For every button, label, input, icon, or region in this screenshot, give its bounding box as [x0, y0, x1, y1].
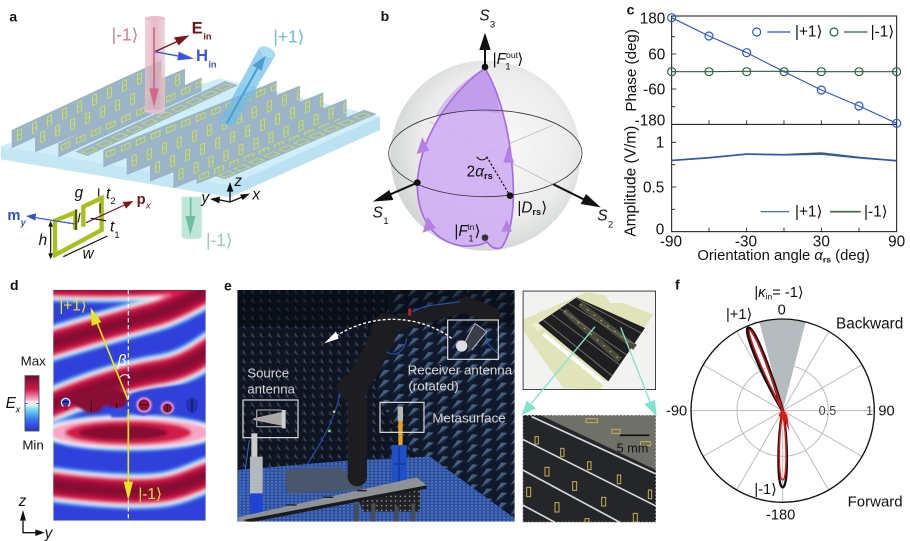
E field arrow: in: [203, 31, 212, 41]
axes zy: z: [18, 493, 27, 510]
panel e: measurement photos: [224, 278, 657, 525]
phase plot: -60: [643, 81, 665, 98]
E field arrow: [155, 18, 212, 52]
optical rail: [237, 477, 427, 522]
label F out: out: [506, 50, 519, 60]
panel c: phase and amplitude charts: [622, 1, 905, 265]
chamber photo: [237, 290, 515, 522]
phase plot: 180: [640, 10, 665, 27]
label source antenna: Source: [247, 365, 289, 380]
arrow to -1: [124, 409, 133, 501]
scale bar: 5 mm: [617, 442, 648, 456]
angle labels: 0.5: [819, 404, 836, 418]
colour bar: x: [15, 404, 21, 414]
H field arrow: H: [196, 46, 208, 65]
label lobe -1: |-1⟩: [754, 482, 777, 498]
angle labels: -180: [766, 507, 795, 523]
unit cell inset: g: [75, 184, 84, 201]
phase axis label: Phase (deg): [623, 29, 640, 112]
sample photo: [523, 291, 656, 390]
coordinate axes: z: [233, 173, 242, 190]
unit cell inset: l: [77, 211, 81, 226]
H field arrow: [155, 46, 217, 69]
heading b: b: [381, 8, 389, 24]
label +1: |+1⟩: [59, 297, 87, 314]
heading d: d: [10, 277, 19, 293]
shaded wedge: [759, 319, 806, 411]
amplitude plot: [643, 135, 905, 251]
coordinate axes: x: [251, 186, 261, 203]
interior axes: [417, 67, 553, 237]
angle labels: [666, 303, 895, 523]
coordinate axes: [200, 173, 261, 207]
amplitude plot: 0.5: [643, 179, 664, 196]
outer circle: [691, 319, 874, 502]
label F in: 1: [468, 233, 474, 243]
arrow to +1: [91, 307, 128, 400]
label F out: ⟩: [517, 51, 523, 68]
label D: rs: [532, 207, 541, 217]
label D: |D: [517, 199, 532, 216]
label lobe +1: |+1⟩: [726, 307, 752, 323]
label source antenna: antenna: [247, 381, 296, 396]
angle labels: -90: [666, 404, 687, 420]
S1 axis: [373, 183, 417, 226]
amplitude legend: |-1⟩: [864, 204, 888, 221]
unit cell inset: [7, 184, 151, 263]
amplitude plot: 30: [813, 234, 830, 251]
S2 axis: 2: [608, 219, 613, 229]
plate: [1, 78, 380, 197]
state points: [414, 64, 513, 241]
label -1: |-1⟩: [138, 486, 162, 503]
E field arrow: E: [192, 18, 203, 37]
label forward: Forward: [848, 493, 903, 510]
+1 lobe: [745, 327, 785, 413]
panel d: field map: [6, 277, 220, 541]
label F out: |F: [493, 51, 506, 68]
label reflected state: |+1⟩: [273, 26, 304, 46]
unit cell inset: y: [20, 217, 27, 227]
label metasurface: Metasurface: [432, 411, 506, 426]
unit cell inset: x: [145, 201, 151, 211]
label backward: Backward: [836, 316, 903, 333]
metallic fins with rings: [12, 60, 377, 188]
receiver antenna box: [448, 320, 498, 359]
label sub 1 of F out: 1: [505, 61, 511, 71]
angle labels: 0: [778, 303, 786, 319]
phase plot: [635, 10, 901, 232]
angle annotation: [467, 157, 510, 196]
colour bar: [6, 354, 46, 453]
sphere: [390, 61, 580, 251]
x axis label: Orientation angle α: [697, 248, 823, 264]
amplitude plot: 90: [888, 234, 905, 251]
label receiver antenna: Receiver antenna: [408, 362, 512, 377]
unit cell inset: t: [106, 185, 111, 202]
dashed centre line: [127, 290, 130, 521]
beta angle: [117, 353, 130, 378]
amplitude axis label: Amplitude (V/m): [622, 126, 639, 237]
unit cell inset: h: [39, 232, 47, 249]
colour bar: E: [6, 395, 17, 412]
phase legend: [753, 24, 894, 41]
coordinate axes: y: [200, 190, 210, 207]
S3 axis: [479, 8, 495, 67]
S1 axis: S: [373, 204, 384, 221]
metasurface stand: [392, 445, 407, 487]
phase plot: -180: [635, 113, 665, 130]
near-field lobes: [70, 383, 206, 417]
source antenna box: [243, 400, 298, 438]
central lens band: [40, 414, 220, 451]
label F in: |F: [454, 223, 468, 240]
phase plot: 60: [648, 46, 665, 63]
angle annotation: 2α: [467, 163, 484, 180]
unit cell inset: 1: [114, 230, 120, 240]
purple path surface: [417, 68, 514, 249]
unit cell inset: t: [110, 219, 115, 236]
angle annotation: rs: [484, 171, 493, 181]
label D: ⟩: [541, 199, 547, 216]
S1 axis: 1: [383, 216, 389, 226]
metasurface box: [380, 402, 424, 447]
phase legend: |-1⟩: [871, 24, 894, 41]
angle labels: 90: [878, 404, 895, 420]
close-up photo: [523, 415, 656, 525]
heading f: f: [675, 276, 680, 292]
unit cell inset: p: [137, 192, 146, 208]
floor absorbers: [237, 457, 515, 522]
label F in: in: [468, 222, 475, 232]
amplitude plot: 0: [656, 222, 664, 239]
label incident state: |-1⟩: [112, 25, 138, 45]
colour bar: Min: [22, 438, 44, 453]
label receiver antenna: (rotated): [408, 379, 459, 394]
equator: [389, 110, 582, 197]
dashed arc: [335, 319, 452, 338]
source stand: [250, 433, 263, 515]
panel f: polar plot: [666, 276, 903, 523]
unit cell inset: m: [7, 208, 20, 224]
robot arm: [354, 305, 492, 477]
unit cell inset: w: [83, 246, 95, 263]
heading c: c: [627, 1, 635, 17]
phase legend: |+1⟩: [795, 24, 822, 41]
cyan zoom arrows: [522, 327, 657, 417]
label kappa: |κ: [754, 285, 765, 301]
x axis label: rs: [823, 255, 831, 265]
transmitted beam: [182, 197, 202, 239]
label kappa: in: [765, 292, 772, 302]
polar grid: [691, 319, 874, 502]
x axis label: (deg): [831, 248, 870, 264]
panel a: metasurface schematic: [1, 8, 380, 263]
label kappa: = -1⟩: [772, 285, 804, 301]
H field arrow: in: [208, 59, 217, 69]
axes zy: [18, 493, 54, 541]
amplitude legend: [761, 204, 888, 221]
S2 axis: S: [597, 208, 608, 225]
label F in: ⟩: [474, 223, 480, 240]
heading e: e: [224, 278, 232, 294]
S2 axis: [553, 184, 613, 229]
beta angle: β: [117, 353, 127, 370]
incident beam: [145, 16, 165, 114]
reflected beam: [218, 44, 277, 125]
amplitude legend: |+1⟩: [795, 204, 822, 221]
unit cell inset: 2: [110, 196, 116, 206]
panel b: Poincare sphere: [373, 8, 613, 251]
heading a: a: [9, 8, 17, 24]
-1 lobe: [778, 408, 789, 487]
amplitude plot: -30: [735, 234, 757, 251]
scale bar: [617, 435, 649, 456]
heatmap: [53, 290, 206, 521]
amplitude plot: -90: [660, 234, 682, 251]
label transmitted state: |-1⟩: [206, 230, 233, 250]
S3 axis: S: [479, 8, 490, 25]
S3 axis: 3: [490, 19, 495, 29]
amplitude plot: 1: [656, 135, 664, 152]
colour bar: Max: [21, 354, 46, 369]
angle labels: 1: [866, 404, 873, 418]
